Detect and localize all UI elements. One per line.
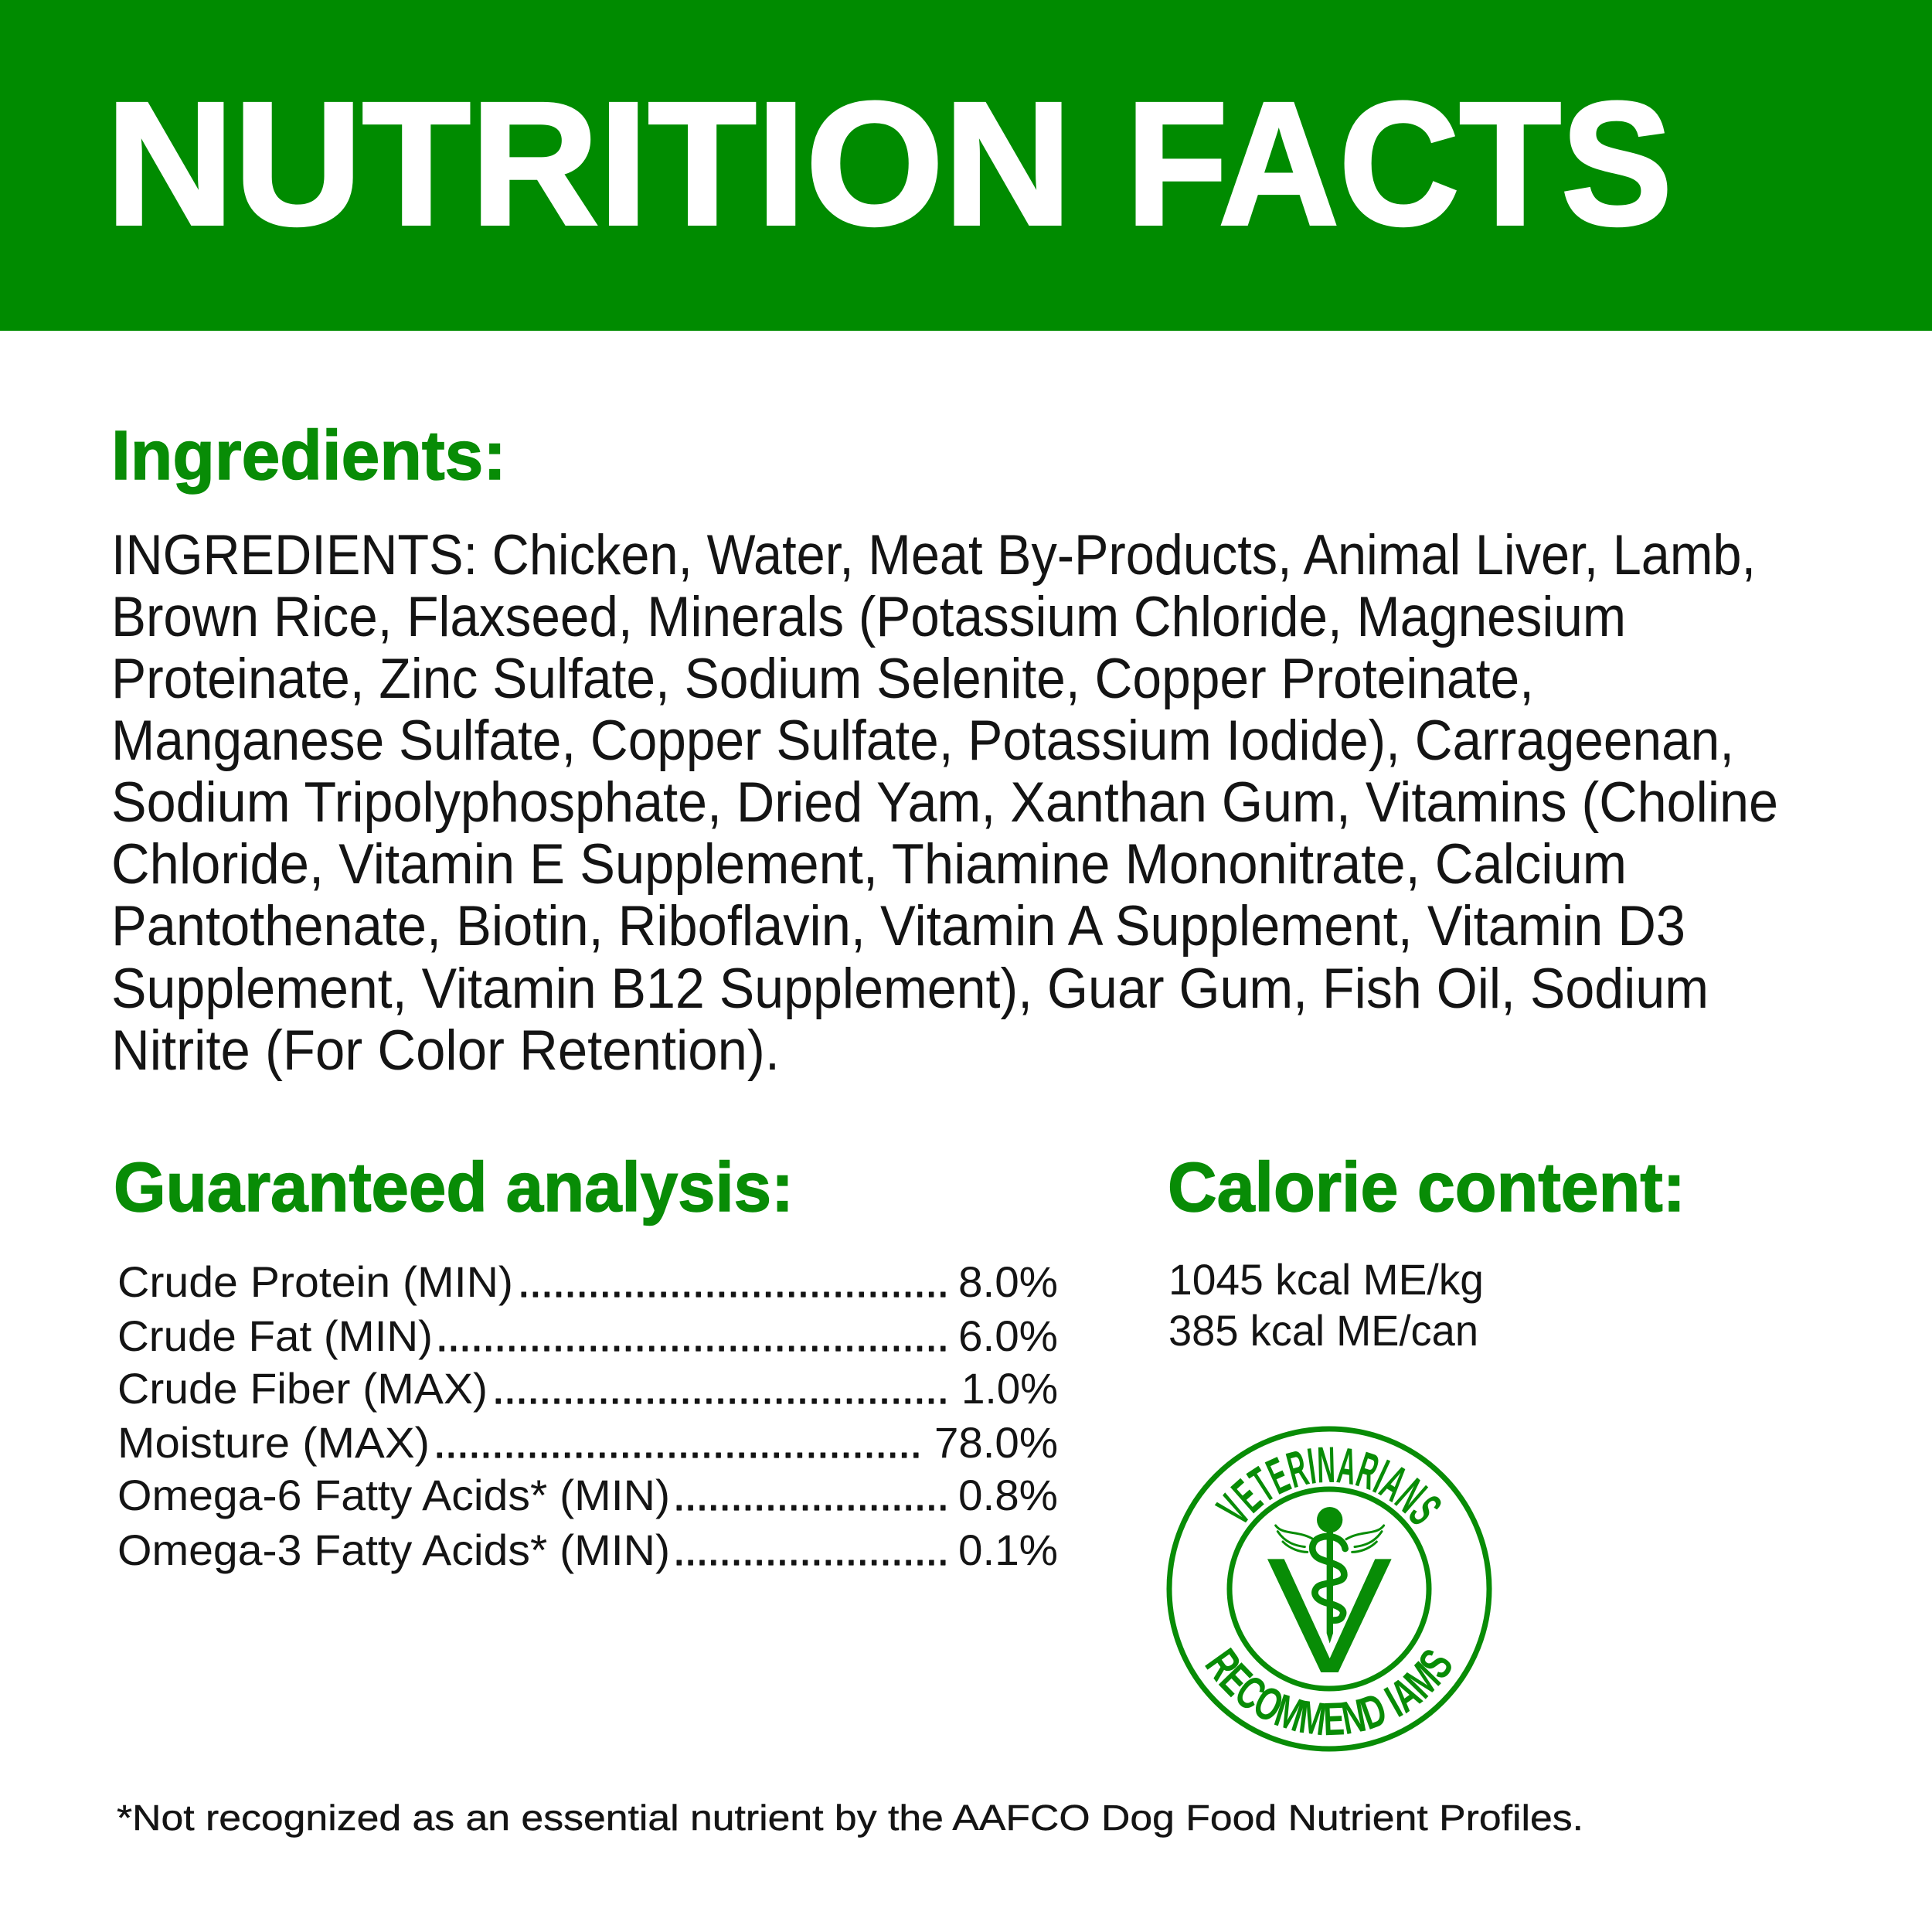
analysis table: 1.0% — [961, 1364, 1058, 1413]
analysis table: 6.0% — [958, 1311, 1058, 1360]
header band — [0, 0, 1932, 331]
analysis table: Crude Fat (MIN) — [117, 1311, 433, 1360]
analysis table: ........................ — [673, 1471, 949, 1519]
panel: calorie content — [1168, 1149, 1685, 1355]
analysis table: .......................................... — [434, 1418, 922, 1467]
analysis table: Moisture (MAX) — [117, 1418, 430, 1467]
analysis table: 0.8% — [958, 1471, 1058, 1519]
ingredients text block: Pantothenate, Biotin, Riboflavin, Vitamin A Supplement, Vitamin D3 — [111, 895, 1685, 957]
ingredients text block — [111, 524, 1778, 1082]
analysis table: ..................................... — [518, 1257, 949, 1306]
analysis table: ............................................ — [436, 1311, 949, 1360]
badge text: recommend iams: RECOMMEND IAMS — [1205, 1648, 1451, 1736]
panel: guaranteed analysis — [114, 1149, 1058, 1574]
ingredients text block: Supplement, Vitamin B12 Supplement), Guar Gum, Fish Oil, Sodium — [111, 957, 1709, 1020]
analysis table — [117, 1257, 1058, 1574]
ingredients text block: INGREDIENTS: Chicken, Water, Meat By-Products, Animal Liver, Lamb, — [111, 524, 1756, 587]
ingredients text block: Brown Rice, Flaxseed, Minerals (Potassium Chloride, Magnesium — [111, 586, 1626, 648]
icon: veterinarians recommend iams badge — [1167, 1427, 1492, 1751]
title — [106, 66, 1672, 262]
analysis table: Crude Protein (MIN) — [117, 1257, 513, 1306]
analysis table: 8.0% — [958, 1257, 1058, 1306]
heading: ingredients: Ingredients: — [111, 417, 506, 495]
ingredients text block: Sodium Tripolyphosphate, Dried Yam, Xanthan Gum, Vitamins (Choline — [111, 771, 1778, 834]
analysis table: ........................ — [673, 1526, 949, 1574]
calorie values: 385 kcal ME/can — [1168, 1306, 1478, 1355]
analysis table: 78.0% — [934, 1418, 1058, 1467]
calorie values — [1168, 1255, 1484, 1355]
analysis table: Crude Fiber (MAX) — [117, 1364, 488, 1413]
ingredients text block: Proteinate, Zinc Sulfate, Sodium Selenite, Copper Proteinate, — [111, 648, 1534, 710]
footnote: *Not recognized as an essential nutrient by the AAFCO Dog Food Nutrient Profiles. — [117, 1798, 1583, 1838]
ingredients text block: Chloride, Vitamin E Supplement, Thiamine Mononitrate, Calcium — [111, 833, 1627, 896]
icon: winged caduceus V — [1267, 1507, 1392, 1672]
analysis table: ....................................... — [492, 1364, 949, 1413]
analysis table: Omega-3 Fatty Acids* (MIN) — [117, 1526, 670, 1574]
title: FACTS — [1126, 66, 1672, 262]
analysis table: Omega-6 Fatty Acids* (MIN) — [117, 1471, 670, 1519]
title: NUTRITION — [106, 66, 1072, 262]
heading: guaranteed analysis: Guaranteed analysis: — [114, 1149, 794, 1226]
badge text: veterinarians: VETERINARIANS — [1215, 1447, 1440, 1524]
heading: calorie content: Calorie content: — [1168, 1149, 1685, 1226]
ingredients text block: Manganese Sulfate, Copper Sulfate, Potassium Iodide), Carrageenan, — [111, 709, 1734, 772]
ingredients text block: Nitrite (For Color Retention). — [111, 1019, 780, 1082]
calorie values: 1045 kcal ME/kg — [1168, 1255, 1484, 1304]
analysis table: 0.1% — [958, 1526, 1058, 1574]
panel: ingredients — [111, 417, 1778, 1082]
